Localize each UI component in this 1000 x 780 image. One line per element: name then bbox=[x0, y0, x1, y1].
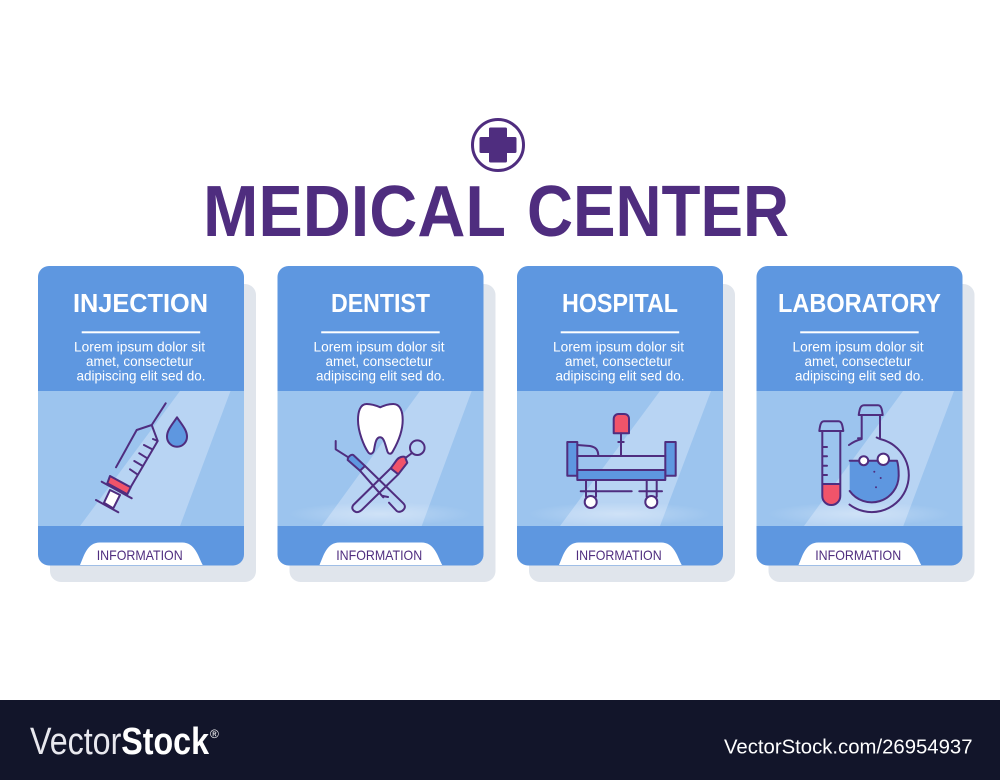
tab: information: INFORMATION bbox=[336, 547, 422, 563]
text block: laboratory: Lorem ipsum dolor sit bbox=[792, 338, 924, 354]
footer bar bbox=[0, 700, 1000, 780]
heading: hospital: HOSPITAL bbox=[562, 288, 678, 318]
heading: laboratory: LABORATORY bbox=[778, 288, 941, 318]
title: MEDICAL bbox=[203, 172, 506, 252]
footer id: VectorStock.com/26954937 bbox=[724, 736, 972, 758]
footer logo: VectorStock bbox=[30, 721, 210, 763]
icon: test tube and flask bbox=[819, 405, 909, 512]
panel: hospital bbox=[517, 266, 735, 582]
panel: injection bbox=[38, 266, 256, 582]
text block: dentist bbox=[314, 338, 445, 384]
text block: dentist: adipiscing elit sed do. bbox=[316, 368, 445, 384]
tab: information: INFORMATION bbox=[815, 547, 901, 563]
text block: hospital: adipiscing elit sed do. bbox=[556, 368, 684, 384]
text block: dentist: Lorem ipsum dolor sit bbox=[314, 338, 445, 354]
title: CENTER bbox=[527, 172, 789, 252]
text block: dentist: amet, consectetur bbox=[326, 353, 433, 369]
tab: information bbox=[80, 542, 203, 565]
icon: syringe with drop bbox=[96, 403, 187, 512]
text block: hospital bbox=[553, 338, 684, 384]
text block: laboratory: adipiscing elit sed do. bbox=[795, 368, 924, 384]
text block: laboratory bbox=[792, 338, 924, 384]
heading: injection: INJECTION bbox=[73, 288, 208, 318]
tab: information: INFORMATION bbox=[576, 547, 662, 563]
text block: hospital: Lorem ipsum dolor sit bbox=[553, 338, 684, 354]
text block: hospital: amet, consectetur bbox=[565, 353, 672, 369]
icon: hospital bed with IV bag bbox=[567, 414, 676, 508]
title bbox=[203, 172, 789, 252]
tab: information bbox=[559, 542, 682, 565]
icon: tooth and dental tools bbox=[336, 404, 425, 512]
tab: information bbox=[798, 542, 921, 565]
panel: dentist bbox=[278, 266, 496, 582]
heading: dentist: DENTIST bbox=[331, 288, 430, 318]
text block: injection: amet, consectetur bbox=[86, 353, 193, 369]
text block: injection bbox=[74, 338, 206, 384]
text block: injection: Lorem ipsum dolor sit bbox=[74, 338, 205, 354]
text block: injection: adipiscing elit sed do. bbox=[76, 368, 206, 384]
text block: laboratory: amet, consectetur bbox=[804, 353, 912, 369]
tab: information: INFORMATION bbox=[97, 547, 183, 563]
tab: information bbox=[320, 542, 442, 565]
panel: laboratory bbox=[756, 266, 974, 582]
footer registered mark: ® bbox=[210, 727, 219, 741]
icon: medical cross in circle bbox=[472, 120, 524, 170]
